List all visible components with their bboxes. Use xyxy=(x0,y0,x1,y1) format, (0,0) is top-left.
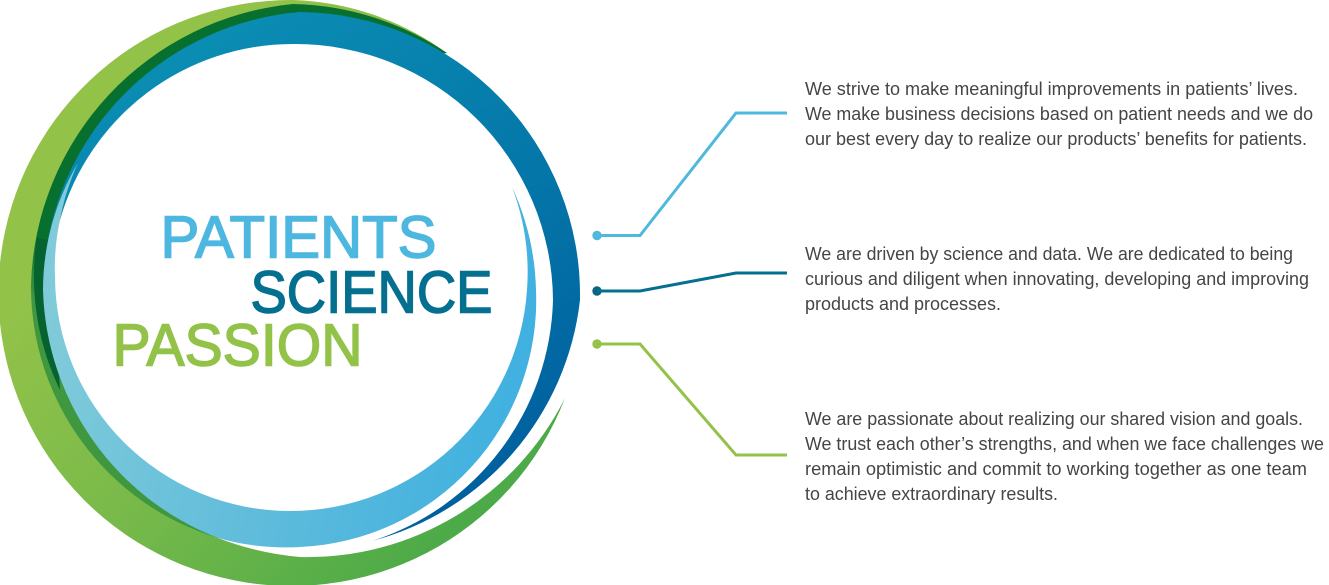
connector: science xyxy=(592,273,787,296)
ring: dark green band xyxy=(31,4,447,538)
text block: patients: We make business decisions based on patient needs and we do xyxy=(805,104,1313,124)
text block: patients: We strive to make meaningful improvements in patients’ lives. xyxy=(805,79,1298,99)
text block: science: We are driven by science and data. We are dedicated to being xyxy=(805,244,1293,264)
text block: science xyxy=(805,244,1309,314)
ring: deep blue band xyxy=(45,12,580,541)
circular logo ring xyxy=(0,0,580,585)
text block: passion xyxy=(805,409,1324,504)
heading: PASSION: PASSION xyxy=(112,312,362,378)
ring: outer green crescent xyxy=(0,0,565,585)
text block: passion: remain optimistic and commit to working together as one team xyxy=(805,459,1307,479)
heading: PATIENTS: PATIENTS xyxy=(160,204,436,270)
heading: SCIENCE: SCIENCE xyxy=(250,260,492,326)
text block: science: products and processes. xyxy=(805,294,1001,314)
text block: patients xyxy=(805,79,1313,149)
text block: passion: We are passionate about realizing our shared vision and goals. xyxy=(805,409,1303,429)
connector: patients xyxy=(592,113,787,240)
text block: passion: to achieve extraordinary results. xyxy=(805,484,1058,504)
text block: science: curious and diligent when innovating, developing and improving xyxy=(805,269,1309,289)
ring: light blue band xyxy=(43,163,536,547)
text block: passion: We trust each other’s strengths, and when we face challenges we xyxy=(805,434,1324,454)
ring: dark green sliver xyxy=(34,237,60,390)
text block: patients: our best every day to realize our products’ benefits for patients. xyxy=(805,129,1307,149)
connector: passion xyxy=(592,339,787,455)
